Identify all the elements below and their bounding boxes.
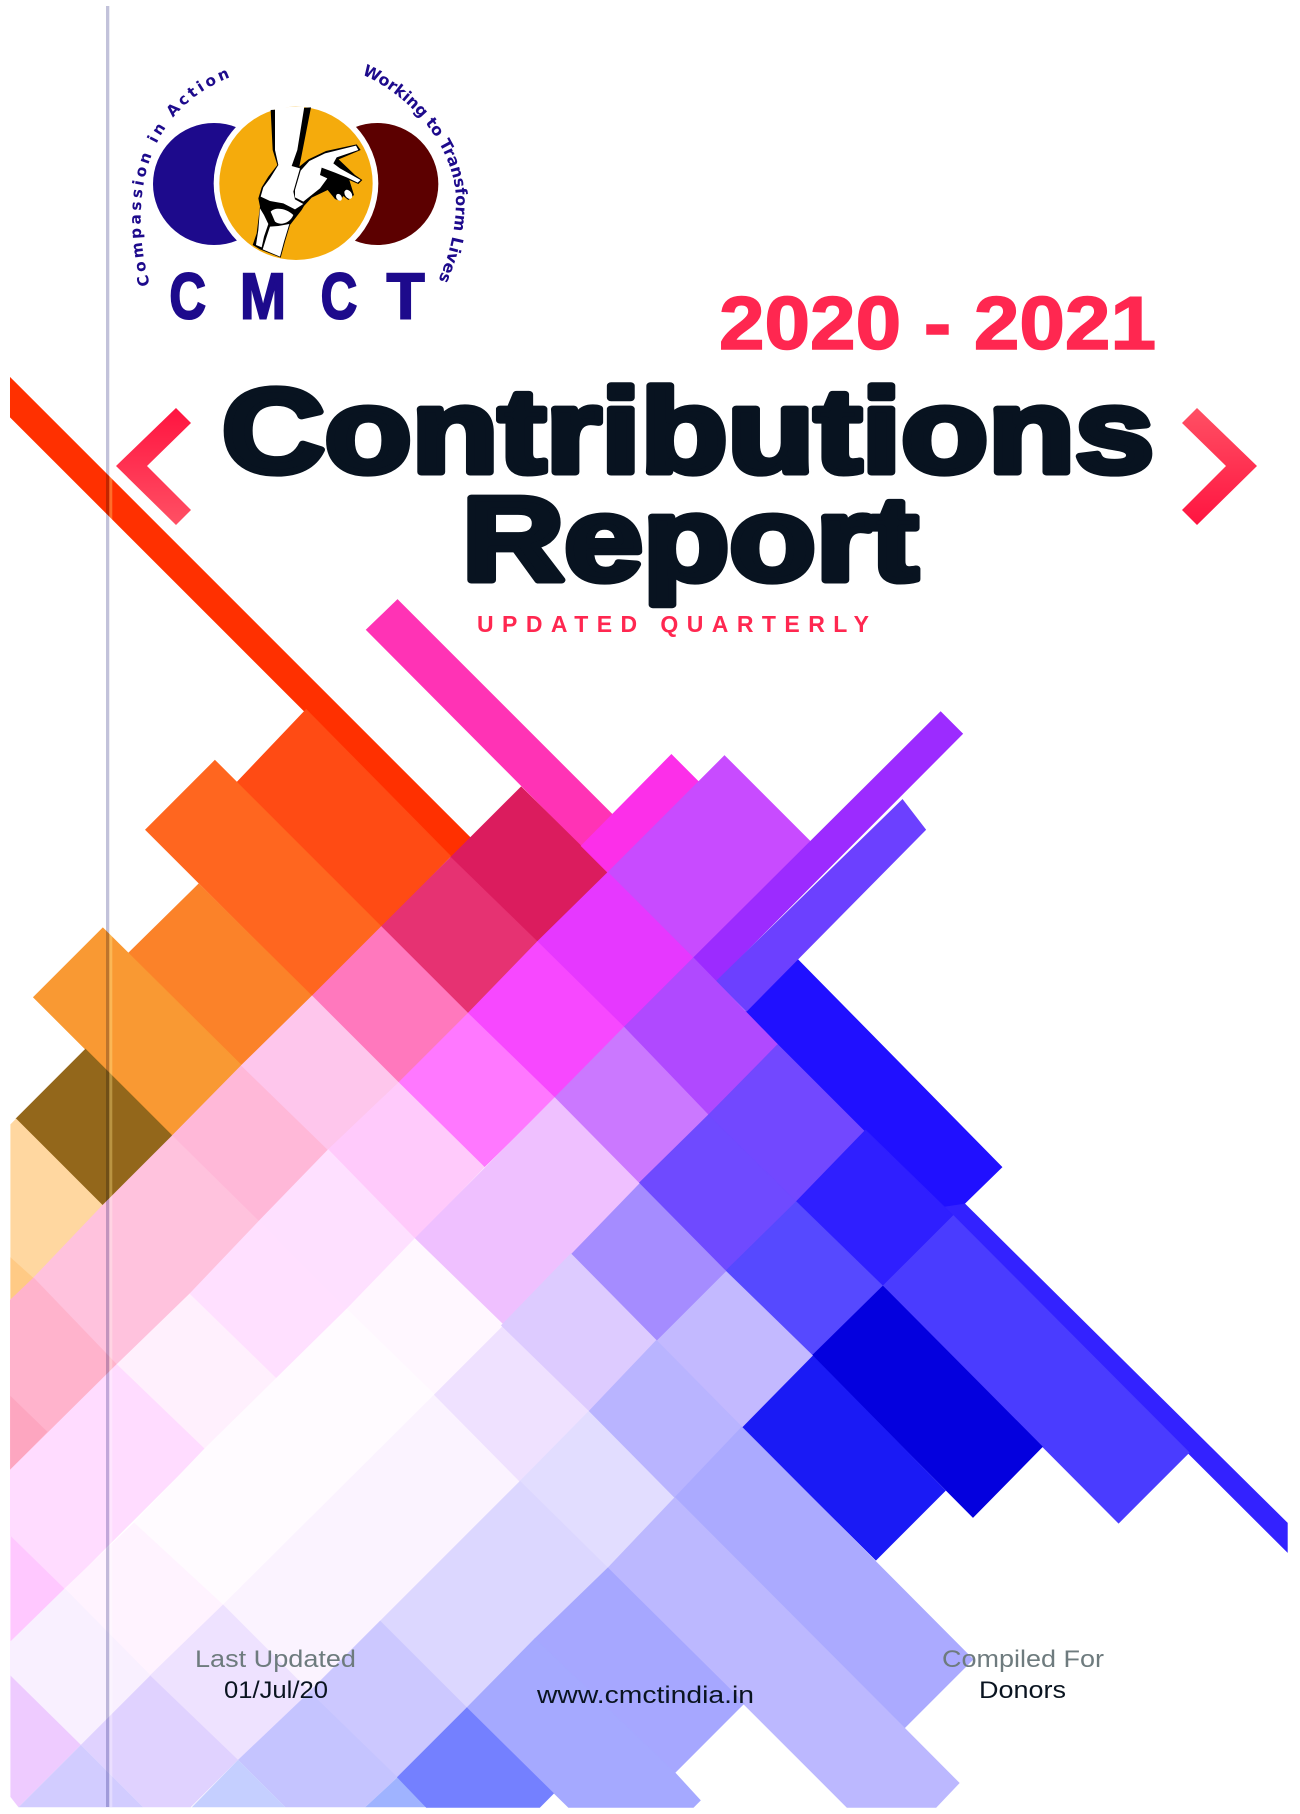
footer: last updated: [195, 1646, 356, 1704]
logo: CMCT: [132, 64, 468, 333]
logo wordmark CMCT: C: [169, 260, 206, 333]
geometric diamond artwork: [10, 378, 1287, 1807]
curved slogan: Working to Transform Lives: Working to Transform Lives: [364, 64, 468, 282]
logo wordmark CMCT: M: [240, 260, 286, 333]
binding fold line: [106, 6, 112, 1807]
logo wordmark CMCT: T: [387, 260, 425, 333]
logo wordmark CMCT: C: [321, 260, 357, 333]
maroon crescent: [316, 123, 438, 245]
icon: helping hands: [253, 107, 362, 258]
footer: compiled for: Compiled For: [942, 1646, 1104, 1673]
footer: last updated: Last Updated: [195, 1646, 356, 1673]
footer: website: www.cmctindia.in: [536, 1682, 754, 1709]
white ring: [214, 101, 378, 266]
curved slogan: Compassion in Action: Compassion in Action: [132, 70, 229, 286]
arrow: left chevron: [116, 408, 191, 525]
title: Report: Report: [462, 473, 918, 606]
footer: compiled for: Donors: [979, 1677, 1066, 1704]
footer: last updated: 01/Jul/20: [224, 1677, 328, 1704]
magenta and purple bands: [312, 600, 1002, 1225]
warm orange and red bands: [10, 378, 471, 1310]
subtitle: UPDATED QUARTERLY: [477, 611, 869, 637]
periwinkle lower bands: [398, 1340, 973, 1807]
orange disc: [219, 107, 373, 260]
date range heading: 2020 - 2021: [719, 281, 1156, 365]
footer: compiled for: [942, 1646, 1104, 1704]
deep blue bands: [571, 1045, 1287, 1560]
logo wordmark CMCT: [169, 260, 425, 333]
arrow: right chevron: [1182, 408, 1257, 525]
blue crescent: [153, 123, 275, 245]
title: Contributions: Contributions: [222, 365, 1154, 498]
pale pink and lavender lattice: [10, 996, 675, 1807]
